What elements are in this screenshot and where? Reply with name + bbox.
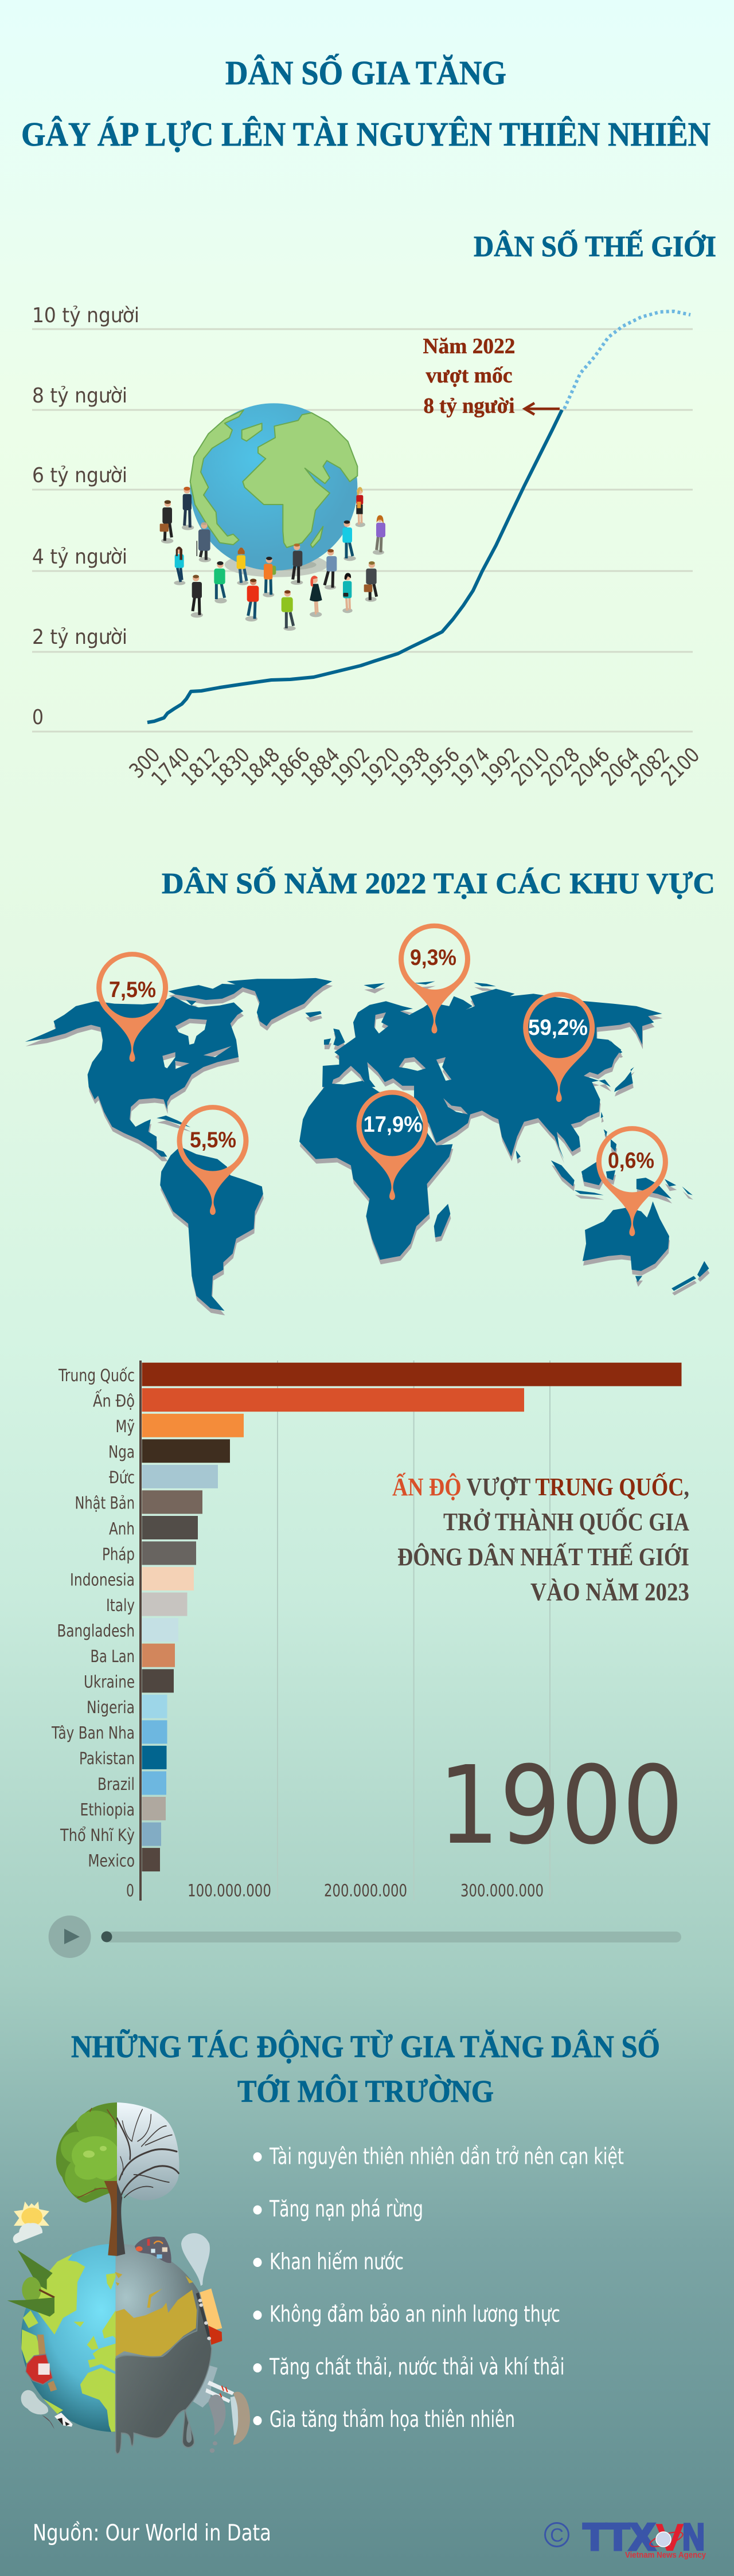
callout: India overtakes China: VÀO NĂM 2023: [530, 1578, 689, 1606]
progress track: [102, 1932, 681, 1942]
country labels: Tây Ban Nha: [51, 1723, 135, 1743]
logo: TTXVN: Vietnam News Agency: [625, 2550, 706, 2560]
illustration: half green half polluted earth: [7, 2102, 250, 2454]
country labels: Brazil: [97, 1774, 135, 1794]
globe: polluted half: [115, 2244, 212, 2454]
x axis labels: 2064: [597, 743, 645, 791]
country labels: Nhật Bản: [75, 1494, 135, 1513]
callout: India overtakes China: ẤN ĐỘ VƯỢT TRUNG QUỐC,: [392, 1472, 689, 1501]
x axis labels: 1812: [177, 743, 225, 791]
x axis labels: 300: [125, 743, 165, 783]
logo: TTXVN: C: [550, 2524, 564, 2546]
country labels: [51, 1366, 135, 1870]
population line, historical: [147, 410, 562, 722]
people: [160, 487, 385, 631]
bar chart race: population by country: [51, 1361, 681, 1901]
country labels: Nigeria: [87, 1698, 135, 1717]
callout: 8 billion in 2022: vượt mốc: [425, 363, 513, 388]
map pin: Oceania 0,6%: [596, 1126, 668, 1236]
country labels: Đức: [109, 1468, 135, 1487]
x axis ticks: 200.000.000: [324, 1881, 407, 1900]
continents: Eurasia, Africa, Oceania: [299, 982, 709, 1291]
callout: India overtakes China: [392, 1472, 689, 1606]
country labels: Thổ Nhĩ Kỳ: [60, 1826, 135, 1845]
map pin: North America 7,5%: 7,5%: [109, 978, 156, 1002]
map pin: Europe 9,3%: [399, 924, 470, 1033]
list items: [269, 2144, 624, 2433]
y axis labels: [32, 304, 139, 729]
illustration: globe with people: [160, 403, 385, 631]
country labels: Ba Lan: [91, 1647, 135, 1666]
x axis labels: 2100: [657, 743, 704, 791]
list items: Tăng chất thải, nước thải và khí thải: [269, 2354, 564, 2380]
country labels: Pakistan: [79, 1749, 135, 1768]
y axis labels: 2 tỷ người: [32, 626, 127, 649]
x axis labels: 1866: [267, 743, 315, 791]
x axis labels: 1830: [207, 743, 255, 791]
heading: world population: DÂN SỐ THẾ GIỚI: [474, 229, 716, 263]
line chart: world population: [32, 304, 704, 791]
globe: [190, 403, 357, 570]
icon: sun and cloud: [13, 2202, 49, 2243]
trunk: [104, 2181, 117, 2256]
country labels: Mỹ: [116, 1417, 135, 1436]
x axis labels: 1902: [327, 743, 374, 791]
list items: Tăng nạn phá rừng: [269, 2196, 423, 2222]
y axis labels: 10 tỷ người: [32, 304, 139, 327]
tree: [56, 2102, 179, 2256]
play control: [49, 1916, 681, 1958]
callout: 8 billion in 2022: [423, 334, 560, 418]
callout: 8 billion in 2022: Năm 2022: [423, 334, 515, 358]
x axis labels: [125, 743, 704, 791]
x axis labels: 1938: [387, 743, 435, 791]
country labels: Ấn Độ: [93, 1390, 135, 1410]
oil spill: [116, 2292, 212, 2454]
x axis labels: 2046: [567, 743, 615, 791]
x axis labels: 1848: [237, 743, 284, 791]
polluted smoke and factory: [186, 2364, 250, 2453]
country labels: Mexico: [88, 1851, 135, 1870]
heading: population by region 2022: DÂN SỐ NĂM 2022 TẠI CÁC KHU VỰC: [162, 866, 715, 900]
map pin: South America 5,5%: 5,5%: [190, 1128, 236, 1152]
country labels: Ukraine: [84, 1672, 135, 1692]
y axis labels: 6 tỷ người: [32, 464, 127, 487]
year counter: 1900: [438, 1743, 684, 1869]
country labels: Pháp: [102, 1545, 135, 1564]
source: Nguồn: Our World in Data: [33, 2520, 271, 2546]
heading: environmental impacts: NHỮNG TÁC ĐỘNG TỪ GIA TĂNG DÂN SỐ: [71, 2029, 660, 2064]
x axis labels: 1884: [297, 743, 345, 791]
map pin: Oceania 0,6%: 0,6%: [608, 1148, 654, 1173]
logo: TTXVN: TTX: [583, 2516, 655, 2558]
map pin: Africa 17,9%: 17,9%: [364, 1112, 422, 1137]
list items: Khan hiếm nước: [270, 2249, 404, 2275]
x axis labels: 1992: [477, 743, 525, 791]
country labels: Bangladesh: [57, 1621, 135, 1641]
globe: healthy half: [21, 2244, 116, 2432]
x axis labels: 2028: [537, 743, 584, 791]
smoke plume: [181, 2233, 210, 2286]
continents: Americas: [25, 978, 345, 1311]
list items: Gia tăng thảm họa thiên nhiên: [270, 2407, 515, 2433]
map pin: Asia 59,2%: 59,2%: [528, 1015, 588, 1040]
heading: environmental impacts: [71, 2029, 660, 2109]
logo: TTXVN: V: [655, 2516, 684, 2559]
y axis labels: 8 tỷ người: [32, 384, 127, 408]
list items: Không đảm bảo an ninh lương thực: [270, 2301, 560, 2328]
icon: fir trees: [7, 2250, 54, 2317]
x axis labels: 2010: [507, 743, 555, 791]
heading: environmental impacts: TỚI MÔI TRƯỜNG: [237, 2074, 494, 2109]
y axis labels: 0: [32, 706, 44, 729]
callout: 8 billion in 2022: 8 tỷ người: [423, 394, 515, 418]
x axis labels: 1956: [417, 743, 464, 791]
healthy crown: [56, 2102, 119, 2203]
map pin: South America 5,5%: [177, 1105, 249, 1215]
country labels: Trung Quốc: [58, 1366, 135, 1385]
country labels: Italy: [106, 1596, 135, 1615]
x axis ticks: 300.000.000: [460, 1881, 544, 1900]
country labels: Anh: [109, 1519, 135, 1538]
x axis labels: 1740: [147, 743, 194, 791]
title: DÂN SỐ GIA TĂNG: [225, 54, 506, 92]
map pin: North America 7,5%: [96, 952, 168, 1062]
world map: [25, 978, 709, 1311]
callout: India overtakes China: TRỞ THÀNH QUỐC GIA: [443, 1507, 689, 1536]
country labels: Indonesia: [70, 1570, 135, 1589]
x axis ticks: 0: [126, 1881, 134, 1900]
x axis ticks: 100.000.000: [188, 1881, 271, 1900]
x axis labels: 1974: [447, 743, 494, 791]
map pin: Africa 17,9%: [357, 1090, 428, 1200]
title: [21, 54, 710, 153]
logo: TTXVN: [545, 2516, 706, 2560]
population line, projection: [564, 311, 690, 409]
callout: India overtakes China: ĐÔNG DÂN NHẤT THẾ GIỚI: [397, 1542, 689, 1571]
map pin: Asia 59,2%: [523, 992, 595, 1102]
y axis labels: 4 tỷ người: [32, 545, 127, 569]
bars: [142, 1363, 681, 1871]
icon: barn: [26, 2335, 57, 2391]
icon: cloud and cow: [21, 2390, 73, 2429]
list: environmental impacts: [253, 2144, 624, 2433]
x axis labels: 1920: [357, 743, 404, 791]
bare crown: [117, 2102, 179, 2200]
icon: trash pile: [135, 2237, 171, 2263]
x axis labels: 2082: [627, 743, 674, 791]
x axis ticks: [126, 1881, 544, 1900]
country labels: Nga: [108, 1443, 135, 1462]
logo: TTXVN: N: [682, 2516, 705, 2558]
country labels: Ethiopia: [80, 1800, 135, 1819]
arrow: [525, 403, 560, 415]
icon: truck: [196, 2289, 222, 2345]
map pin: Europe 9,3%: 9,3%: [410, 945, 456, 970]
